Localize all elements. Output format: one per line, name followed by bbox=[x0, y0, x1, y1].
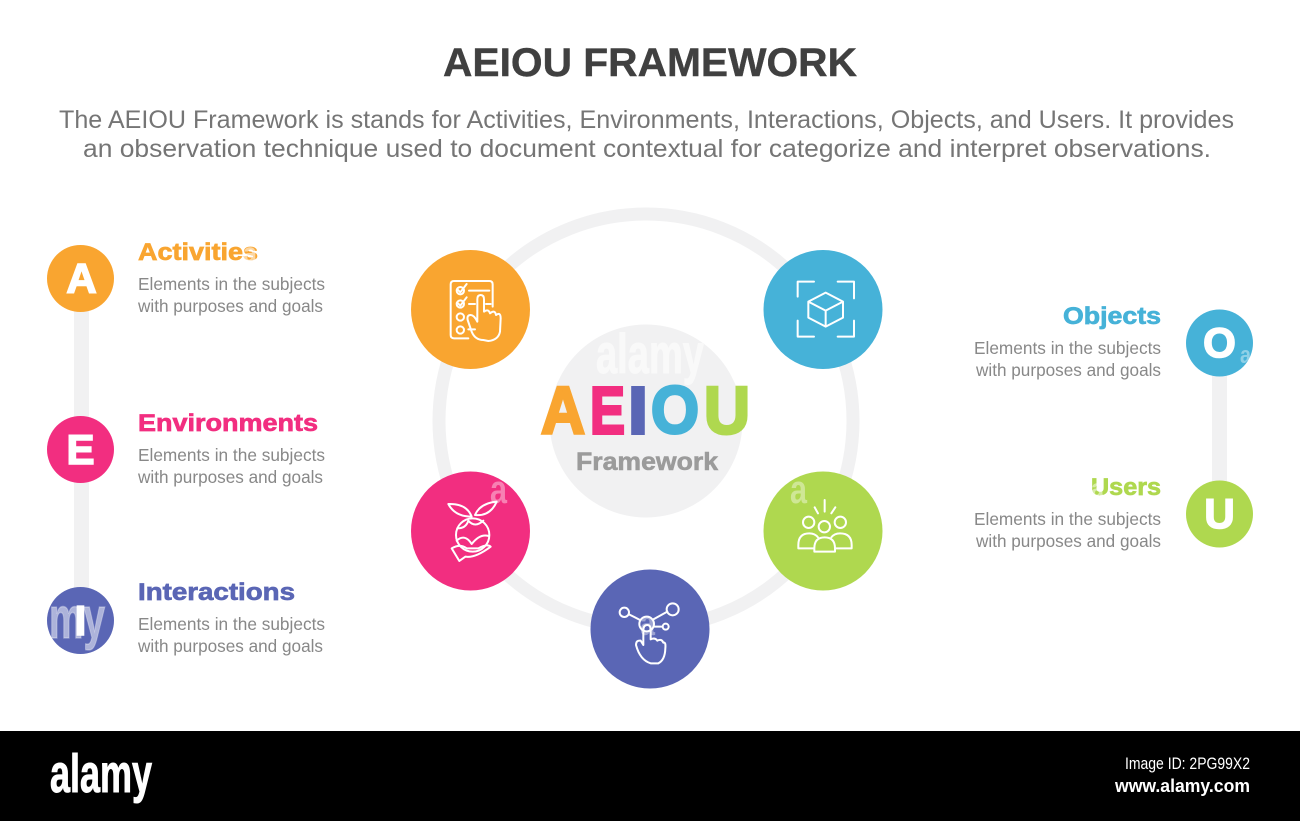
item: users: U bbox=[1204, 490, 1235, 537]
item: objects bbox=[974, 303, 1253, 380]
node: users icon circle bbox=[764, 468, 882, 590]
item: interactions: I bbox=[75, 597, 86, 644]
item: activities: with purposes and goals bbox=[137, 296, 323, 316]
node: interactions icon circle bbox=[590, 570, 710, 688]
panel: right list rail bbox=[1212, 343, 1227, 514]
item: interactions: Elements in the subjects bbox=[138, 614, 325, 634]
item: objects: Objects bbox=[1063, 303, 1161, 330]
node: objects icon circle bbox=[764, 250, 882, 369]
item: objects: a bbox=[1240, 342, 1252, 369]
center hub: alamy bbox=[596, 322, 704, 385]
image id: Image ID: 2PG99X2 bbox=[1125, 754, 1250, 773]
intro paragraph bbox=[59, 106, 1234, 163]
center hub bbox=[541, 322, 750, 518]
panel: left list rail bbox=[74, 278, 89, 620]
item: users bbox=[974, 473, 1253, 551]
center hub: I bbox=[628, 374, 648, 448]
center hub: Framework bbox=[576, 448, 718, 476]
center hub: U bbox=[704, 374, 750, 448]
website: www.alamy.com bbox=[1114, 776, 1250, 796]
item: users: a bbox=[1091, 473, 1104, 503]
item: interactions bbox=[47, 579, 325, 656]
node: activities icon circle bbox=[411, 250, 530, 369]
item: users: with purposes and goals bbox=[975, 531, 1161, 551]
item: interactions: Interactions bbox=[138, 579, 295, 606]
node: environments icon circle: a bbox=[490, 468, 508, 512]
item: activities bbox=[47, 237, 325, 316]
item: objects: with purposes and goals bbox=[975, 360, 1161, 380]
item: objects: O bbox=[1203, 319, 1236, 366]
center hub: O bbox=[651, 373, 699, 448]
item: environments bbox=[47, 410, 325, 487]
item: activities: a bbox=[243, 237, 257, 268]
panel: central cycle diagram bbox=[411, 214, 882, 688]
item: interactions: my bbox=[49, 586, 105, 651]
node: users icon circle: a bbox=[790, 468, 808, 512]
intro paragraph: an observation technique used to document contextual for categorize and interpret observations. bbox=[83, 135, 1211, 163]
item: objects: Elements in the subjects bbox=[974, 338, 1161, 358]
item: interactions: with purposes and goals bbox=[137, 636, 323, 656]
footer logo: alamy bbox=[50, 744, 152, 804]
node: environments icon circle bbox=[411, 468, 530, 590]
item: activities: A bbox=[66, 255, 97, 302]
footer bar bbox=[0, 731, 1300, 821]
item: environments: Elements in the subjects bbox=[138, 445, 325, 465]
item: environments: E bbox=[66, 426, 95, 473]
item: activities: Activities bbox=[138, 239, 258, 266]
item: activities: Elements in the subjects bbox=[138, 274, 325, 294]
item: users: Users bbox=[1091, 474, 1161, 501]
center hub: E bbox=[590, 374, 625, 448]
item: users: Elements in the subjects bbox=[974, 509, 1161, 529]
item: environments: Environments bbox=[138, 410, 318, 437]
node: interactions icon circle: a bbox=[640, 602, 656, 643]
center hub: A bbox=[541, 374, 585, 448]
item: environments: with purposes and goals bbox=[137, 467, 323, 487]
title: AEIOU FRAMEWORK bbox=[443, 41, 857, 85]
intro paragraph: The AEIOU Framework is stands for Activities, Environments, Interactions, Objects, and Users. It provides bbox=[59, 106, 1234, 134]
outer ring bbox=[439, 214, 853, 628]
